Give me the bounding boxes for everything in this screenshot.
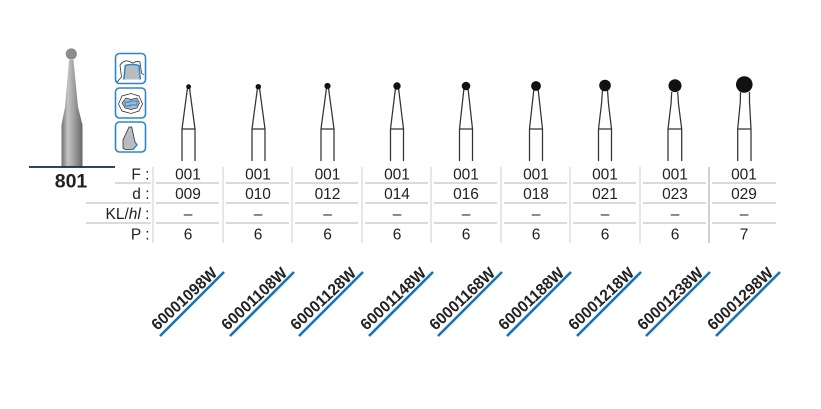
- column 5: size 016: 016: [453, 186, 479, 203]
- order codes with blue underlines: 60001298W: [705, 264, 778, 334]
- column 5: size 016: 001: [453, 166, 479, 183]
- column 6: size 018: [523, 81, 549, 243]
- order codes with blue underlines: 60001188W: [496, 264, 569, 334]
- column 5: size 016: –: [462, 206, 471, 223]
- row labels: F :: [131, 166, 150, 183]
- column 7: size 021: 021: [592, 186, 618, 203]
- order codes with blue underlines: 60001168W: [427, 264, 500, 334]
- column 2: size 010: 010: [245, 186, 271, 203]
- column 1: size 009: –: [184, 206, 193, 223]
- column 7: size 021: 001: [592, 166, 618, 183]
- icon: crown preparation: [116, 54, 146, 84]
- column 3: size 012: 6: [323, 226, 332, 243]
- column 1: size 009: 6: [184, 226, 192, 243]
- column 3: size 012: –: [323, 206, 332, 223]
- column 1: size 009: 009: [175, 186, 201, 203]
- row labels: KL/hl :: [106, 206, 150, 223]
- column 8: size 023: 023: [662, 186, 688, 203]
- column 3: size 012: [315, 83, 340, 243]
- column 1: size 009: [175, 84, 201, 243]
- order codes with blue underlines: 60001098W: [149, 264, 222, 334]
- column 5: size 016: 6: [462, 226, 470, 243]
- column 7: size 021: 6: [601, 226, 609, 243]
- order codes with blue underlines: 60001218W: [566, 264, 639, 334]
- column 6: size 018: 6: [532, 226, 540, 243]
- baseline under bur: [29, 166, 115, 168]
- column 3: size 012: 012: [315, 186, 340, 203]
- order codes with blue underlines: 60001148W: [358, 264, 431, 334]
- column 4: size 014: 001: [384, 166, 410, 183]
- column 4: size 014: 014: [384, 186, 410, 203]
- order codes with blue underlines: 60001108W: [219, 264, 292, 334]
- column 5: size 016: [453, 82, 479, 243]
- main bur illustration: [62, 48, 82, 167]
- row labels: d :: [132, 186, 150, 203]
- column 4: size 014: –: [393, 206, 402, 223]
- column 6: size 018: –: [532, 206, 541, 223]
- column 8: size 023: –: [671, 206, 680, 223]
- column 2: size 010: [245, 84, 271, 243]
- column 2: size 010: –: [254, 206, 263, 223]
- order codes with blue underlines: [149, 264, 780, 336]
- column 1: size 009: 001: [175, 166, 201, 183]
- column 8: size 023: [662, 79, 688, 243]
- column 4: size 014: [384, 82, 410, 243]
- product number: 801: [55, 170, 87, 192]
- column 8: size 023: 6: [671, 226, 679, 243]
- column 7: size 021: –: [601, 206, 610, 223]
- column 9: size 029: 001: [731, 166, 757, 183]
- column 6: size 018: 018: [523, 186, 549, 203]
- table rules: [86, 167, 776, 243]
- column 4: size 014: 6: [393, 226, 401, 243]
- column 6: size 018: 001: [523, 166, 549, 183]
- column 8: size 023: 001: [662, 166, 688, 183]
- column 7: size 021: [592, 80, 618, 243]
- column 9: size 029: –: [740, 206, 749, 223]
- column 2: size 010: 001: [245, 166, 271, 183]
- row labels: P :: [131, 226, 150, 243]
- icon: cavity top view: [116, 88, 146, 118]
- column 9: size 029: 7: [740, 226, 748, 243]
- column 2: size 010: 6: [254, 226, 262, 243]
- row labels: [106, 166, 150, 243]
- column 9: size 029: 029: [731, 186, 757, 203]
- column 3: size 012: 001: [315, 166, 340, 183]
- order codes with blue underlines: 60001238W: [635, 264, 708, 334]
- order codes with blue underlines: 60001128W: [288, 264, 361, 334]
- icon: tooth section: [116, 122, 146, 152]
- column 9: size 029: [731, 76, 757, 243]
